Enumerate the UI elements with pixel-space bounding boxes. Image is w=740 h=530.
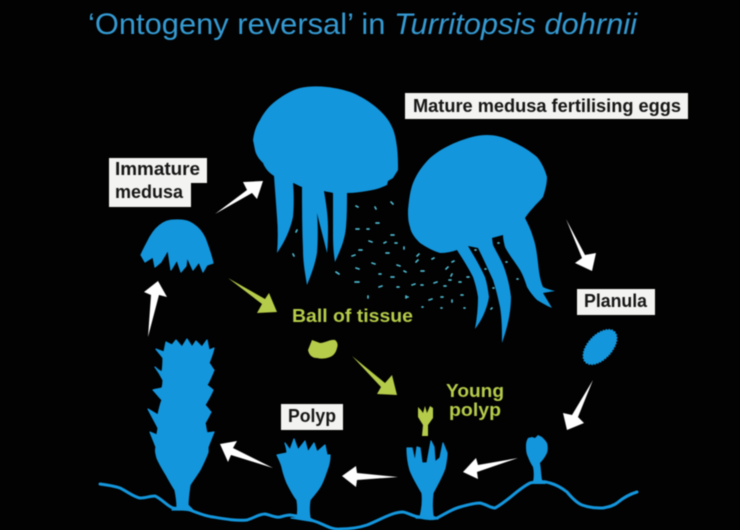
arrow: polyp to tall polyp [220, 441, 273, 468]
label: planula: Planula [584, 291, 648, 311]
eggs and sperm cloud [293, 202, 518, 309]
label: polyp [281, 404, 343, 430]
arrow: ball of tissue to young polyp [352, 356, 397, 395]
label: young polyp: polyp [449, 399, 501, 420]
label: immature medusa: medusa [115, 182, 184, 202]
planula [577, 323, 623, 371]
arrow: tall polyp to immature medusa [144, 281, 167, 337]
arrow: forked polyp to polyp [342, 466, 398, 487]
label: young polyp [446, 380, 504, 420]
label: polyp: Polyp [288, 406, 336, 426]
arrow: small polyp to forked polyp [463, 458, 518, 479]
label: mature medusa fertilising eggs: Mature medusa fertilising eggs [413, 96, 681, 116]
small polyp [526, 435, 548, 484]
label: immature medusa: Immature [115, 159, 200, 179]
tall polyp [148, 339, 214, 510]
label: young polyp: Young [446, 380, 504, 401]
arrow: planula to polyp [563, 380, 593, 430]
medusa fertilising eggs [408, 135, 555, 343]
forked polyp [407, 441, 447, 519]
ball of tissue shape [308, 340, 338, 359]
young polyp shape [418, 406, 433, 436]
seabed line [100, 482, 637, 529]
polyp [277, 439, 330, 522]
arrow: to planula [566, 219, 596, 271]
immature medusa [141, 220, 213, 272]
label: immature medusa [109, 158, 207, 207]
arrow: immature to mature medusa [215, 181, 263, 214]
mature medusa [253, 86, 398, 285]
label: ball of tissue: Ball of tissue [292, 305, 413, 326]
arrow: medusa to ball of tissue [228, 278, 277, 313]
title: ‘Ontogeny reversal’ in Turritopsis dohrnii [88, 8, 638, 41]
label: planula [577, 289, 655, 315]
